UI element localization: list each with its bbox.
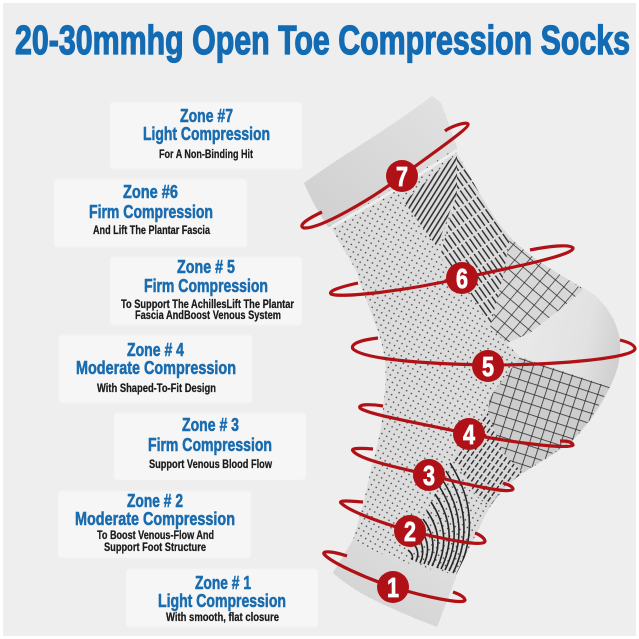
card: zone 4: Zone # 4 xyxy=(127,339,185,360)
card: zone 1: Zone # 1 xyxy=(195,572,251,593)
stripes: achilles dashes xyxy=(440,155,510,327)
card: zone 7: Light Compression xyxy=(143,123,270,144)
ring 5 xyxy=(352,338,635,365)
card: zone 1 xyxy=(126,569,318,627)
card: zone 4: Moderate Compression xyxy=(76,357,236,378)
card: zone 5 xyxy=(110,256,302,325)
bottom cuff xyxy=(333,540,457,627)
badge 7 xyxy=(386,160,418,192)
card: zone 2: Moderate Compression xyxy=(75,508,235,529)
badge 7: 7 xyxy=(396,161,408,192)
curved ribs xyxy=(408,463,469,574)
badge 1: 1 xyxy=(387,572,399,603)
top cuff xyxy=(304,96,457,227)
badge 4: 4 xyxy=(463,419,475,450)
card: zone 6: Zone #6 xyxy=(123,181,178,202)
card: zone 2 xyxy=(58,490,251,558)
card: zone 3: Zone # 3 xyxy=(182,414,239,435)
card: zone 7 xyxy=(110,102,302,169)
crosshatch: upper xyxy=(490,237,583,343)
heel panel xyxy=(508,290,620,389)
sock illustration xyxy=(290,90,630,635)
card: zone 3: Support Venous Blood Flow xyxy=(149,459,272,471)
card: zone 5: Fascia AndBoost Venous System xyxy=(135,310,281,322)
crosshatch: lower xyxy=(487,357,610,473)
card: zone 4 xyxy=(59,335,252,403)
badge 4 xyxy=(453,418,485,450)
card: zone 2: To Boost Venous-Flow And xyxy=(97,530,214,542)
card: zone 5: Firm Compression xyxy=(144,275,268,296)
card: zone 3: Firm Compression xyxy=(148,434,272,455)
badge 3: 3 xyxy=(423,460,435,491)
card: zone 4: With Shaped-To-Fit Design xyxy=(97,383,216,395)
card: zone 2: Support Foot Structure xyxy=(104,542,206,554)
card: zone 7: For A Non-Binding Hit xyxy=(159,149,253,161)
card: zone 5: To Support The AchillesLift The Plantar xyxy=(121,299,294,311)
card: zone 2: Zone # 2 xyxy=(127,490,183,511)
ring 7 xyxy=(302,123,468,228)
card: zone 3 xyxy=(114,413,306,480)
badge 2 xyxy=(394,515,426,547)
ring 2 xyxy=(341,501,485,543)
badge 2: 2 xyxy=(404,516,416,547)
card: zone 5: Zone # 5 xyxy=(177,256,235,277)
card: zone 1: With smooth, flat closure xyxy=(166,612,279,624)
ring 3 xyxy=(352,448,513,491)
badge 6 xyxy=(446,262,478,294)
stripes: upper steep xyxy=(407,156,457,243)
card: zone 6: And Lift The Plantar Fascia xyxy=(93,225,210,237)
badge 1 xyxy=(377,571,409,603)
card: zone 1: Light Compression xyxy=(158,590,286,611)
ring 6 xyxy=(331,246,573,295)
card: zone 6 xyxy=(54,179,247,247)
card: zone 6: Firm Compression xyxy=(89,201,213,222)
ring 1 xyxy=(324,552,465,602)
badge 5: 5 xyxy=(482,351,494,382)
card: zone 7: Zone #7 xyxy=(180,105,233,126)
small dashes xyxy=(456,415,521,502)
badge 3 xyxy=(413,459,445,491)
ring 4 xyxy=(360,405,573,447)
badge 5 xyxy=(472,350,504,382)
badge 6: 6 xyxy=(456,263,468,294)
